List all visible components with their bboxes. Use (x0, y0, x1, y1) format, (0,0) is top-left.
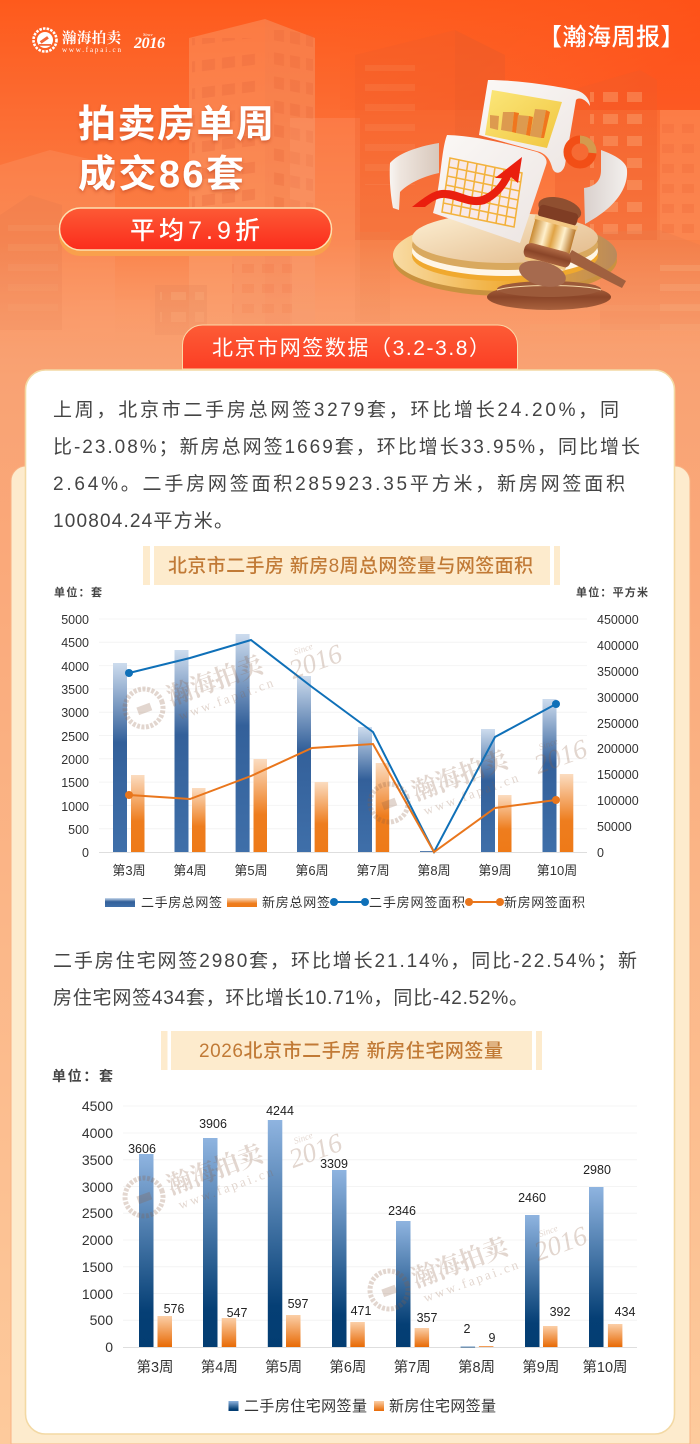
x axis labels: 第10周 (537, 863, 577, 878)
y axis: 0 (105, 1339, 113, 1355)
x axis labels: 第9周 (478, 863, 512, 878)
since label: Since (143, 32, 153, 37)
value labels: 3606 (128, 1142, 156, 1156)
value labels: 357 (417, 1311, 437, 1325)
icon: seal (34, 28, 56, 52)
y axis: 2500 (82, 1205, 113, 1221)
x axis labels (136, 1358, 628, 1376)
left axis: 1000 (61, 800, 89, 814)
chart 1 legend: 新房总网签 (262, 895, 330, 910)
watermark chart 1 right (365, 715, 591, 838)
back ring left (390, 143, 439, 210)
value labels: 547 (227, 1306, 247, 1320)
value labels: 3309 (320, 1157, 348, 1171)
x axis labels: 第8周 (458, 1358, 495, 1376)
back ring right (584, 150, 627, 224)
watermark chart 1 left: Since (292, 641, 314, 657)
intro paragraph (53, 399, 640, 532)
x axis labels (112, 863, 577, 878)
watermark chart 2 right: www.fapai.cn (421, 1256, 522, 1305)
chart 1: weekly total signings and area (54, 585, 648, 910)
right axis: 450000 (597, 613, 639, 627)
x axis labels: 第7周 (356, 863, 390, 878)
donut icon (568, 139, 593, 164)
left axis: 500 (68, 823, 89, 837)
second paragraph: 房住宅网签434套，环比增长10.71%，同比-42.52%。 (53, 987, 528, 1009)
front scroll (433, 135, 547, 243)
second paragraph: 二手房住宅网签2980套，环比增长21.14%，同比-22.54%；新 (53, 950, 637, 972)
y axis (82, 1098, 113, 1355)
value labels: 392 (550, 1305, 570, 1319)
watermark chart 1 left: 瀚海拍卖 (163, 650, 268, 711)
right axis: 150000 (597, 768, 639, 782)
intro paragraph: 2.64%。二手房网签面积285923.35平方米，新房网签面积 (53, 473, 625, 495)
x axis labels: 第7周 (394, 1358, 431, 1376)
chart 2 legend: 二手房住宅网签量 (244, 1398, 367, 1415)
x axis labels: 第9周 (522, 1358, 559, 1376)
y axis: 1500 (82, 1259, 113, 1275)
gavel base (487, 281, 611, 310)
left axis: 3000 (61, 706, 89, 720)
title: 成交86套 (78, 154, 244, 196)
right axis: 300000 (597, 691, 639, 705)
chart 2 heading: 2026北京市二手房 新房住宅网签量 (199, 1040, 503, 1062)
value labels: 576 (164, 1302, 184, 1316)
tab title: 北京市网签数据（3.2-3.8） (212, 337, 490, 360)
left axis: 1500 (61, 776, 89, 790)
x axis labels: 第3周 (136, 1358, 174, 1376)
value labels: 2346 (388, 1204, 416, 1218)
white content card (26, 370, 674, 1434)
watermark chart 1 right: www.fapai.cn (421, 769, 522, 818)
right unit: 单位：平方米 (576, 585, 648, 599)
right axis: 400000 (597, 639, 639, 653)
watermark chart 2 right (365, 1202, 591, 1325)
chart 2 legend: 新房住宅网签量 (389, 1398, 496, 1415)
watermark chart 1 right: Since (537, 736, 559, 752)
illustration: data scrolls, podium and gavel (390, 80, 627, 310)
orange line: new-home area (125, 744, 560, 852)
x axis labels: 第5周 (265, 1358, 302, 1376)
since year: 2016 (133, 35, 165, 52)
x axis labels: 第4周 (173, 863, 207, 878)
value labels (128, 1104, 635, 1345)
discount pill (59, 208, 332, 256)
red arrow (412, 157, 522, 207)
x axis labels: 第6周 (295, 863, 329, 878)
y axis: 3500 (82, 1152, 113, 1168)
mini bar chart (490, 109, 550, 138)
right axis: 50000 (597, 820, 632, 834)
gavel handle (566, 250, 626, 288)
watermark chart 2 left: www.fapai.cn (176, 1163, 277, 1212)
x axis labels: 第6周 (329, 1358, 366, 1376)
podium (393, 213, 617, 296)
left axis: 4000 (61, 660, 89, 674)
left axis (61, 613, 89, 860)
watermark chart 2 left: 2016 (285, 1127, 346, 1174)
watermark chart 1 left (120, 620, 346, 743)
watermark chart 2 right: 2016 (530, 1220, 591, 1267)
second paragraph (53, 950, 637, 1009)
section tab (182, 325, 518, 369)
value labels: 434 (615, 1305, 635, 1319)
logo url: www.fapai.cn (62, 46, 122, 54)
watermark chart 1 right: 瀚海拍卖 (408, 745, 513, 806)
watermark chart 2 left: 瀚海拍卖 (163, 1139, 268, 1200)
left axis: 2500 (61, 730, 89, 744)
report tag: 【瀚海周报】 (538, 24, 685, 51)
yellow card (485, 90, 562, 148)
hero cityscape background (0, 0, 700, 370)
unit: 单位：套 (52, 1068, 113, 1084)
x axis labels: 第3周 (112, 863, 146, 878)
left axis: 2000 (61, 753, 89, 767)
chart 2: weekly residential signings (52, 1068, 637, 1415)
blue bars: second-hand residential (139, 1120, 604, 1348)
intro paragraph: 100804.24平方米。 (53, 510, 233, 532)
y axis: 4500 (82, 1098, 113, 1114)
y axis: 3000 (82, 1179, 113, 1195)
blue bars: second-hand total (113, 634, 556, 852)
blue line: second-hand area (125, 640, 560, 852)
chart 1 legend (105, 895, 585, 910)
chart 1 heading: 北京市二手房 新房8周总网签量与网签面积 (168, 555, 533, 577)
chart 2 heading (161, 1031, 542, 1070)
value labels: 9 (489, 1331, 496, 1345)
watermark chart 1 left: www.fapai.cn (176, 674, 277, 723)
gavel head (516, 192, 586, 292)
chart 1 legend: 二手房网签面积 (369, 895, 465, 910)
value labels: 2460 (518, 1191, 546, 1205)
watermark chart 1 right: 2016 (530, 733, 591, 780)
pill text: 平均7.9折 (130, 217, 260, 245)
right axis: 250000 (597, 717, 639, 731)
watermark chart 2 left: Since (292, 1130, 314, 1146)
orange bars: new-home residential (158, 1315, 622, 1347)
right axis: 100000 (597, 794, 639, 808)
right axis: 0 (597, 846, 604, 860)
left axis: 3500 (61, 683, 89, 697)
back scroll (479, 80, 590, 173)
value labels: 597 (288, 1297, 308, 1311)
watermark chart 2 right: Since (537, 1223, 559, 1239)
logo wordmark: 瀚海拍卖 (62, 29, 122, 47)
watermark chart 1 left: 2016 (285, 638, 346, 685)
y axis: 2000 (82, 1232, 113, 1248)
cream back panel (11, 466, 690, 1444)
value labels: 4244 (266, 1104, 294, 1118)
left unit: 单位：套 (54, 585, 102, 599)
left axis: 4500 (61, 636, 89, 650)
chart 1 legend: 新房网签面积 (504, 895, 585, 910)
right axis: 350000 (597, 665, 639, 679)
value labels: 471 (351, 1304, 371, 1318)
chart 1 heading (143, 546, 560, 585)
logo: 瀚海拍卖 (34, 28, 165, 54)
intro paragraph: 上周，北京市二手房总网签3279套，环比增长24.20%，同 (53, 399, 619, 421)
y axis: 4000 (82, 1125, 113, 1141)
title: 拍卖房单周 (78, 104, 274, 146)
right axis: 200000 (597, 742, 639, 756)
left axis: 0 (82, 846, 89, 860)
chart 2 legend (228, 1398, 496, 1415)
value labels: 2 (464, 1322, 471, 1336)
value labels: 3906 (199, 1117, 227, 1131)
x axis labels: 第4周 (201, 1358, 238, 1376)
x axis labels: 第10周 (582, 1358, 628, 1376)
right axis (597, 613, 639, 860)
y axis: 500 (90, 1312, 113, 1328)
watermark chart 2 right: 瀚海拍卖 (408, 1232, 513, 1293)
x axis labels: 第5周 (234, 863, 268, 878)
x axis labels: 第8周 (417, 863, 451, 878)
grid (442, 158, 522, 227)
orange bars: new-home total (131, 759, 573, 852)
chart 1 legend: 二手房总网签 (141, 895, 222, 910)
value labels: 2980 (583, 1163, 611, 1177)
y axis: 1000 (82, 1286, 113, 1302)
intro paragraph: 比-23.08%；新房总网签1669套，环比增长33.95%，同比增长 (53, 436, 640, 458)
title (78, 104, 274, 196)
watermark chart 2 left (120, 1109, 346, 1232)
left axis: 5000 (61, 613, 89, 627)
